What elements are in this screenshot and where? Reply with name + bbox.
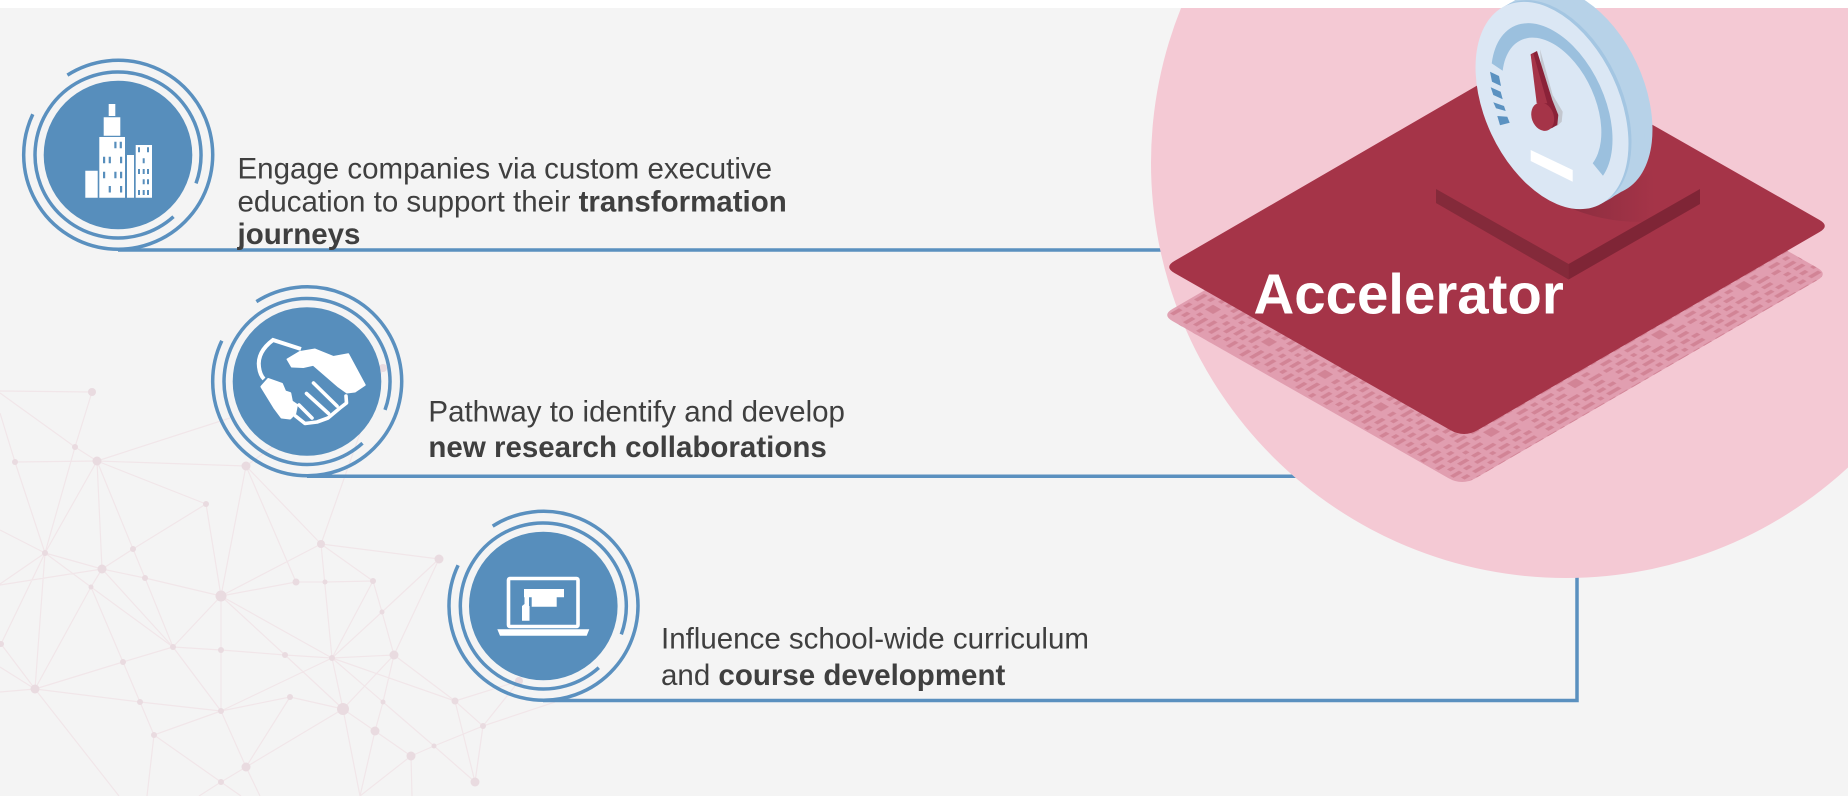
icon: speedometer gauge: [1445, 0, 1683, 234]
connector line: middle: [307, 474, 1320, 478]
label: Accelerator: Accelerator: [1254, 262, 1564, 326]
text: research collaborations: new research collaborations: [428, 431, 827, 464]
icon: handshake badge: [213, 287, 402, 476]
network pattern: [0, 364, 555, 796]
text: curriculum: and course development: [661, 659, 1005, 692]
connector line: top: [118, 248, 1200, 252]
red platform: [1169, 59, 1825, 434]
icon: buildings badge: [24, 60, 213, 249]
text: engage companies: education to support their transformation: [238, 186, 787, 218]
text: research collaborations: [428, 396, 845, 464]
platform recess: [1436, 189, 1700, 280]
text: curriculum: Influence school-wide curriculum: [661, 622, 1089, 655]
text: research collaborations: Pathway to identify and develop: [428, 396, 845, 428]
text: engage companies: [236, 152, 787, 251]
pink circle: [1151, 0, 1848, 578]
text: curriculum: [661, 622, 1089, 692]
text: engage companies: Engage companies via custom executive: [238, 152, 772, 186]
gauge shadow: [1566, 170, 1655, 222]
text: engage companies: journeys: [236, 218, 360, 251]
icon: laptop graduation badge: [449, 511, 638, 700]
patterned lower platform: [1167, 107, 1823, 482]
connector line: bottom: [543, 560, 1577, 700]
